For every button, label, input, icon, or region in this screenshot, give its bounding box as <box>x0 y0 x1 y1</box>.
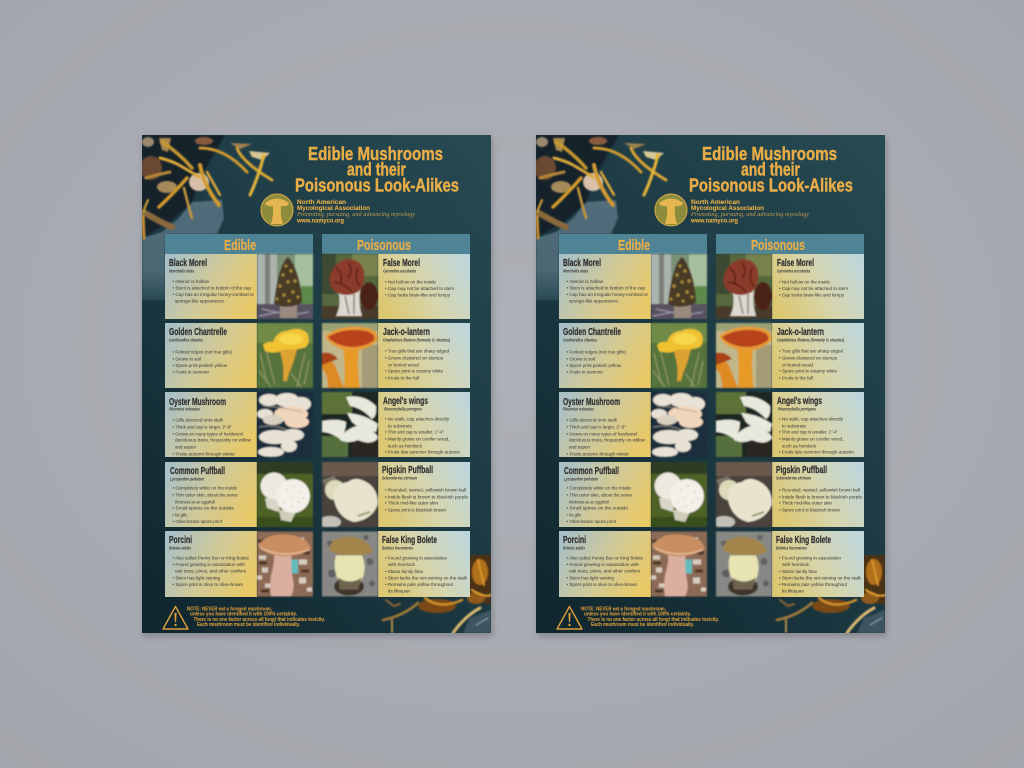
association text: Mycological Association <box>297 206 370 212</box>
card: Oyster Mushroom: Oyster Mushroom <box>563 397 620 408</box>
card: False King Bolete: • Remains pale yellow throughout <box>385 582 454 588</box>
card: Oyster Mushroom: and aspen <box>569 445 590 451</box>
card: Jack-o-lantern: • Fruits in the fall <box>779 376 813 382</box>
card: Black Morel: • Stem is attached to bottom of the cap <box>566 286 645 292</box>
card: Jack-o-lantern: • True gills that are sharp edged <box>779 349 843 355</box>
heading: Poisonous: Poisonous <box>751 238 805 254</box>
card: Oyster Mushroom: and aspen <box>175 445 196 451</box>
title: and their <box>347 160 406 180</box>
association text: Promoting, pursuing, and advancing mycology <box>690 212 809 218</box>
card: Angel's wings <box>322 392 470 457</box>
photo: jack-o-lantern <box>716 323 772 388</box>
card: Pigskin Puffball: Pigskin Puffball <box>382 465 433 476</box>
card: Porcini: Boletus edulis <box>169 546 191 550</box>
card: False King Bolete: False King Bolete <box>776 535 831 546</box>
card: False Morel <box>322 254 470 319</box>
card: Angel's wings <box>716 392 864 457</box>
card: Angel's wings: Angel's wings <box>777 396 822 407</box>
card: Common Puffball <box>559 462 707 527</box>
card: Porcini: • Stem has light veining <box>566 576 614 582</box>
card: Porcini: • Stem has light veining <box>172 576 220 582</box>
heading: Edible <box>559 234 707 254</box>
warning note: NOTE: NEVER eat a foraged mushroom, <box>187 607 273 613</box>
poster shadow <box>143 138 493 637</box>
warning note: There is no one factor across all fungi that indicates toxicity. <box>194 617 326 623</box>
card: Pigskin Puffball: • Rounded, warted, yellowish brown ball <box>385 488 466 494</box>
photo: false morel <box>716 254 772 319</box>
card: Porcini: oak trees, pines, and other conifers <box>175 569 247 575</box>
card: Jack-o-lantern: • True gills that are sharp edged <box>385 349 449 355</box>
card: Jack-o-lantern: • Grows clustered on stumps <box>779 356 838 362</box>
card: False Morel: • Not hollow on the inside <box>385 279 436 285</box>
card: False Morel: • Cap looks brain-like and lumpy <box>385 293 451 299</box>
card: Porcini: oak trees, pines, and other conifers <box>569 569 641 575</box>
card: Black Morel: • Interior is hollow <box>172 279 209 285</box>
warning note: unless you have identified it with 100% certainty. <box>190 612 298 618</box>
card: Angel's wings: Pleurocybella porrigens <box>778 406 816 411</box>
card: Jack-o-lantern: Jack-o-lantern <box>777 327 824 338</box>
card: Black Morel: sponge-like appearance <box>569 298 618 304</box>
card: Pigskin Puffball: • Spore print is blackish brown <box>385 508 446 514</box>
card: Angel's wings: • Fruits late summer through autumn <box>385 450 460 456</box>
card: Oyster Mushroom: • Thick and cap is larger, 2"-8" <box>566 425 626 431</box>
card: Common Puffball: • Completely white on the inside <box>566 486 631 492</box>
card: Golden Chantrelle: • Grows in soil <box>172 357 201 363</box>
photo: black morel <box>651 254 707 319</box>
card: Pigskin Puffball <box>713 462 864 528</box>
card: False King Bolete: • Stains faintly blue <box>385 569 423 575</box>
card: Angel's wings: such as hemlock <box>388 444 423 450</box>
card: Angel's wings: such as hemlock <box>782 444 817 450</box>
card: Common Puffball: Common Puffball <box>564 466 619 477</box>
card: Golden Chantrelle: Golden Chantrelle <box>169 327 227 338</box>
icon: warning triangle <box>557 606 582 629</box>
card: Oyster Mushroom <box>559 392 707 458</box>
photo: angel's wings <box>716 392 772 457</box>
title <box>689 144 853 196</box>
photo: false morel <box>322 254 378 319</box>
poster paper <box>142 135 491 633</box>
card: Golden Chantrelle: • Fruits in summer <box>172 370 209 376</box>
title <box>295 144 459 196</box>
association text: www.namyco.org <box>690 218 738 224</box>
card: False King Bolete: • Stem lacks the net-veining on the stalk <box>385 576 468 582</box>
card: Black Morel: Black Morel <box>169 258 207 269</box>
card: Jack-o-lantern: • Grows clustered on stumps <box>385 356 444 362</box>
card: False King Bolete: • Found growing in association <box>385 555 447 561</box>
card: False King Bolete <box>322 531 470 597</box>
card: Black Morel: • Interior is hollow <box>566 279 603 285</box>
card: Golden Chantrelle: Cantharellus cibarius <box>563 338 597 343</box>
photo: oyster mushroom <box>257 392 313 457</box>
warning note <box>581 607 720 628</box>
card: False King Bolete: • Stem lacks the net-veining on the stalk <box>779 576 862 582</box>
card: Common Puffball: Common Puffball <box>170 466 225 477</box>
association text: Promoting, pursuing, and advancing mycology <box>296 212 415 218</box>
warning note: Each mushroom must be identified individually. <box>197 622 301 628</box>
card: False King Bolete: its lifespan <box>388 589 410 595</box>
chanterelle and stone artwork <box>140 135 491 633</box>
card: Common Puffball: • Small spines on the outside <box>172 506 234 512</box>
card: False Morel: Gyromitra esculenta <box>383 268 416 274</box>
heading: Poisonous: Poisonous <box>357 238 411 254</box>
card: Black Morel: Morchella elata <box>169 268 194 274</box>
card: Pigskin Puffball: Pigskin Puffball <box>776 465 827 476</box>
card: Jack-o-lantern: • Spore print is creamy white <box>779 369 837 375</box>
card: False Morel: • Not hollow on the inside <box>779 279 830 285</box>
card: Jack-o-lantern: Jack-o-lantern <box>383 327 430 338</box>
card: Oyster Mushroom: • Grows on many types of hardwood <box>566 431 637 437</box>
poster: left copy <box>140 135 493 637</box>
card: Oyster Mushroom: • Gills descend onto stalk <box>172 418 223 424</box>
card: False King Bolete: Boletus huronensis <box>776 546 807 550</box>
card: Oyster Mushroom: deciduous trees, frequently on willow <box>175 438 251 444</box>
card: Angel's wings: • No stalk, cap attaches directly <box>779 417 844 423</box>
card: Golden Chantrelle: • Forked ridges (not true gills) <box>566 350 626 356</box>
photo: common puffball <box>651 462 707 527</box>
card: False King Bolete: • Found growing in association <box>779 555 841 561</box>
card: False King Bolete <box>716 531 864 597</box>
card: Common Puffball: Lycoperdon perlatum <box>170 476 204 482</box>
heading: Poisonous <box>716 234 864 254</box>
card: Porcini: • Found growing in association with <box>566 562 639 568</box>
photo: golden chantrelle <box>651 323 707 388</box>
card: Jack-o-lantern <box>716 323 864 388</box>
card: Pigskin Puffball: • Spore print is blackish brown <box>779 508 840 514</box>
card: False Morel <box>716 254 864 319</box>
photo: pigskin puffball <box>713 462 772 528</box>
card: Porcini: Porcini <box>169 535 192 546</box>
card: Angel's wings: • Thin and cap is smaller, 1"-4" <box>385 430 444 436</box>
warning note: NOTE: NEVER eat a foraged mushroom, <box>581 607 667 613</box>
card: Angel's wings: • Thin and cap is smaller, 1"-4" <box>779 430 838 436</box>
photo: common puffball <box>257 462 313 527</box>
card: False King Bolete: with hemlock <box>782 562 810 568</box>
association text: www.namyco.org <box>296 218 344 224</box>
card: Porcini <box>165 531 313 597</box>
poster shadow <box>537 138 887 637</box>
card: Pigskin Puffball: • Inside flesh is brown to blackish purple <box>779 494 862 500</box>
photo: black morel <box>257 254 313 319</box>
association text: North American <box>297 200 346 206</box>
photo: oyster mushroom <box>651 392 707 457</box>
card: Jack-o-lantern <box>322 323 470 388</box>
card: False Morel: • Cap looks brain-like and lumpy <box>779 293 845 299</box>
warning note: There is no one factor across all fungi that indicates toxicity. <box>588 617 720 623</box>
association text: Mycological Association <box>691 206 764 212</box>
card: Angel's wings: • Mainly grows on conifer wood, <box>385 437 450 443</box>
photo: jack-o-lantern <box>322 323 378 388</box>
card: Common Puffball: • No gills <box>172 513 187 519</box>
card: Porcini: • Found growing in association with <box>172 562 245 568</box>
photo: porcini <box>257 532 313 596</box>
card: Golden Chantrelle: Golden Chantrelle <box>563 327 621 338</box>
card: Golden Chantrelle: • Spore print pinkish yellow <box>566 363 621 369</box>
card: Common Puffball: thickness as an eggshell <box>175 500 215 506</box>
icon: association logo <box>261 194 293 226</box>
card: Common Puffball: • Thin outer skin, about the same <box>566 493 632 499</box>
card: Oyster Mushroom: • Gills descend onto stalk <box>566 418 617 424</box>
card: Angel's wings: to substrate <box>782 424 806 430</box>
warning note <box>187 607 326 628</box>
warning note: unless you have identified it with 100% certainty. <box>584 612 692 618</box>
card: Common Puffball: • Thin outer skin, about the same <box>172 493 238 499</box>
card: Jack-o-lantern: or buried wood <box>388 363 419 369</box>
photo: golden chantrelle <box>257 323 313 388</box>
card: Angel's wings: • Mainly grows on conifer wood, <box>779 437 844 443</box>
association text <box>296 200 415 224</box>
association text: North American <box>691 200 740 206</box>
card: Pigskin Puffball: • Inside flesh is brown to blackish purple <box>385 494 468 500</box>
card: Black Morel: Black Morel <box>563 258 601 269</box>
card: Black Morel: • Cap has an irregular honey-combed or <box>566 292 648 298</box>
card: Common Puffball: • Olive-brown spore print <box>566 519 617 525</box>
card: Pigskin Puffball: • Rounded, warted, yellowish brown ball <box>779 488 860 494</box>
icon: warning triangle <box>163 606 188 629</box>
card: Common Puffball: • Small spines on the outside <box>566 506 628 512</box>
title: Edible Mushrooms <box>308 144 443 164</box>
card: Pigskin Puffball <box>319 462 470 528</box>
card: Pigskin Puffball: Scleroderma citrinum <box>776 476 811 480</box>
card: False King Bolete: • Stains faintly blue <box>779 569 817 575</box>
card: Oyster Mushroom: Oyster Mushroom <box>169 397 226 408</box>
card: Angel's wings: to substrate <box>388 424 412 430</box>
card: Oyster Mushroom: Pleurotus ostreatus <box>169 407 200 412</box>
card: Golden Chantrelle <box>559 323 707 388</box>
card: Black Morel: • Cap has an irregular honey-combed or <box>172 292 254 298</box>
card: False Morel: • Cap may not be attached to stem <box>779 286 848 292</box>
card: Porcini: • Also called Penny Bun or King Bolete <box>172 555 249 561</box>
card: Porcini: Porcini <box>563 535 586 546</box>
card: False King Bolete: its lifespan <box>782 589 804 595</box>
card: Black Morel: sponge-like appearance <box>175 298 224 304</box>
card: Jack-o-lantern: or buried wood <box>782 363 813 369</box>
heading: Poisonous <box>322 234 470 254</box>
card: Pigskin Puffball: • Thick rind-like outer skin <box>779 501 832 507</box>
title: Poisonous Look-Alikes <box>689 176 853 196</box>
card: Common Puffball <box>165 462 313 527</box>
card: Black Morel: Morchella elata <box>563 268 588 274</box>
title: Edible Mushrooms <box>702 144 837 164</box>
card: Oyster Mushroom: • Thick and cap is larger, 2"-8" <box>172 425 232 431</box>
card: Jack-o-lantern: • Spore print is creamy white <box>385 369 443 375</box>
card: Oyster Mushroom: • Fruits autumn through winter <box>566 452 629 458</box>
heading: Edible: Edible <box>224 238 256 254</box>
title: Poisonous Look-Alikes <box>295 176 459 196</box>
card: Golden Chantrelle: • Forked ridges (not true gills) <box>172 350 232 356</box>
card: Black Morel <box>559 254 707 319</box>
card: Golden Chantrelle: • Spore print pinkish yellow <box>172 363 227 369</box>
card: Angel's wings: Pleurocybella porrigens <box>384 406 422 411</box>
card: Golden Chantrelle <box>165 323 313 388</box>
card: False King Bolete: with hemlock <box>388 562 416 568</box>
card: False Morel: Gyromitra esculenta <box>777 268 810 274</box>
card: Golden Chantrelle: • Fruits in summer <box>566 370 603 376</box>
title: and their <box>741 160 800 180</box>
poster: right copy <box>534 135 887 637</box>
warning note: Each mushroom must be identified individually. <box>591 622 695 628</box>
card: Common Puffball: Lycoperdon perlatum <box>564 476 598 482</box>
photo: angel's wings <box>322 392 378 457</box>
card: False Morel: False Morel <box>383 258 420 269</box>
chanterelle and stone artwork <box>534 135 885 633</box>
card: Porcini: Boletus edulis <box>563 546 585 550</box>
card: Common Puffball: • No gills <box>566 513 581 519</box>
card: Porcini: • Spore print is olive to olive-brown <box>566 582 637 588</box>
card: Porcini: • Also called Penny Bun or King Bolete <box>566 555 643 561</box>
card: False King Bolete: Boletus huronensis <box>382 546 413 550</box>
card: Angel's wings: Angel's wings <box>383 396 428 407</box>
poster paper <box>536 135 885 633</box>
card: Angel's wings: • Fruits late summer through autumn <box>779 450 854 456</box>
card: Jack-o-lantern: Omphalotus illudens (formerly O. olearius) <box>383 338 450 343</box>
card: Golden Chantrelle: Cantharellus cibarius <box>169 338 203 343</box>
card: Porcini: • Spore print is olive to olive-brown <box>172 582 243 588</box>
card: Oyster Mushroom: deciduous trees, frequently on willow <box>569 438 645 444</box>
card: Common Puffball: • Olive-brown spore print <box>172 519 223 525</box>
card: Angel's wings: • No stalk, cap attaches directly <box>385 417 450 423</box>
card: Golden Chantrelle: • Grows in soil <box>566 357 595 363</box>
card: Oyster Mushroom: • Grows on many types of hardwood <box>172 431 243 437</box>
card: Oyster Mushroom: Pleurotus ostreatus <box>563 407 594 412</box>
card: False Morel: • Cap may not be attached to stem <box>385 286 454 292</box>
card: Jack-o-lantern: Omphalotus illudens (formerly O. olearius) <box>777 338 844 343</box>
heading: Edible: Edible <box>618 238 650 254</box>
photo: porcini <box>651 532 707 596</box>
card: Black Morel <box>165 254 313 319</box>
card: Pigskin Puffball: Scleroderma citrinum <box>382 476 417 480</box>
association text <box>690 200 809 224</box>
card: False King Bolete: False King Bolete <box>382 535 437 546</box>
card: Porcini <box>559 531 707 597</box>
photo: false king bolete <box>322 532 378 596</box>
card: Oyster Mushroom: • Fruits autumn through winter <box>172 452 235 458</box>
icon: association logo <box>655 194 687 226</box>
card: False King Bolete: • Remains pale yellow throughout <box>779 582 848 588</box>
card: Jack-o-lantern: • Fruits in the fall <box>385 376 419 382</box>
card: False Morel: False Morel <box>777 258 814 269</box>
card: Common Puffball: thickness as an eggshell <box>569 500 609 506</box>
heading: Edible <box>165 234 313 254</box>
card: Oyster Mushroom <box>165 392 313 458</box>
photo: false king bolete <box>716 532 772 596</box>
card: Common Puffball: • Completely white on the inside <box>172 486 237 492</box>
photo: pigskin puffball <box>319 462 378 528</box>
card: Black Morel: • Stem is attached to bottom of the cap <box>172 286 251 292</box>
card: Pigskin Puffball: • Thick rind-like outer skin <box>385 501 438 507</box>
